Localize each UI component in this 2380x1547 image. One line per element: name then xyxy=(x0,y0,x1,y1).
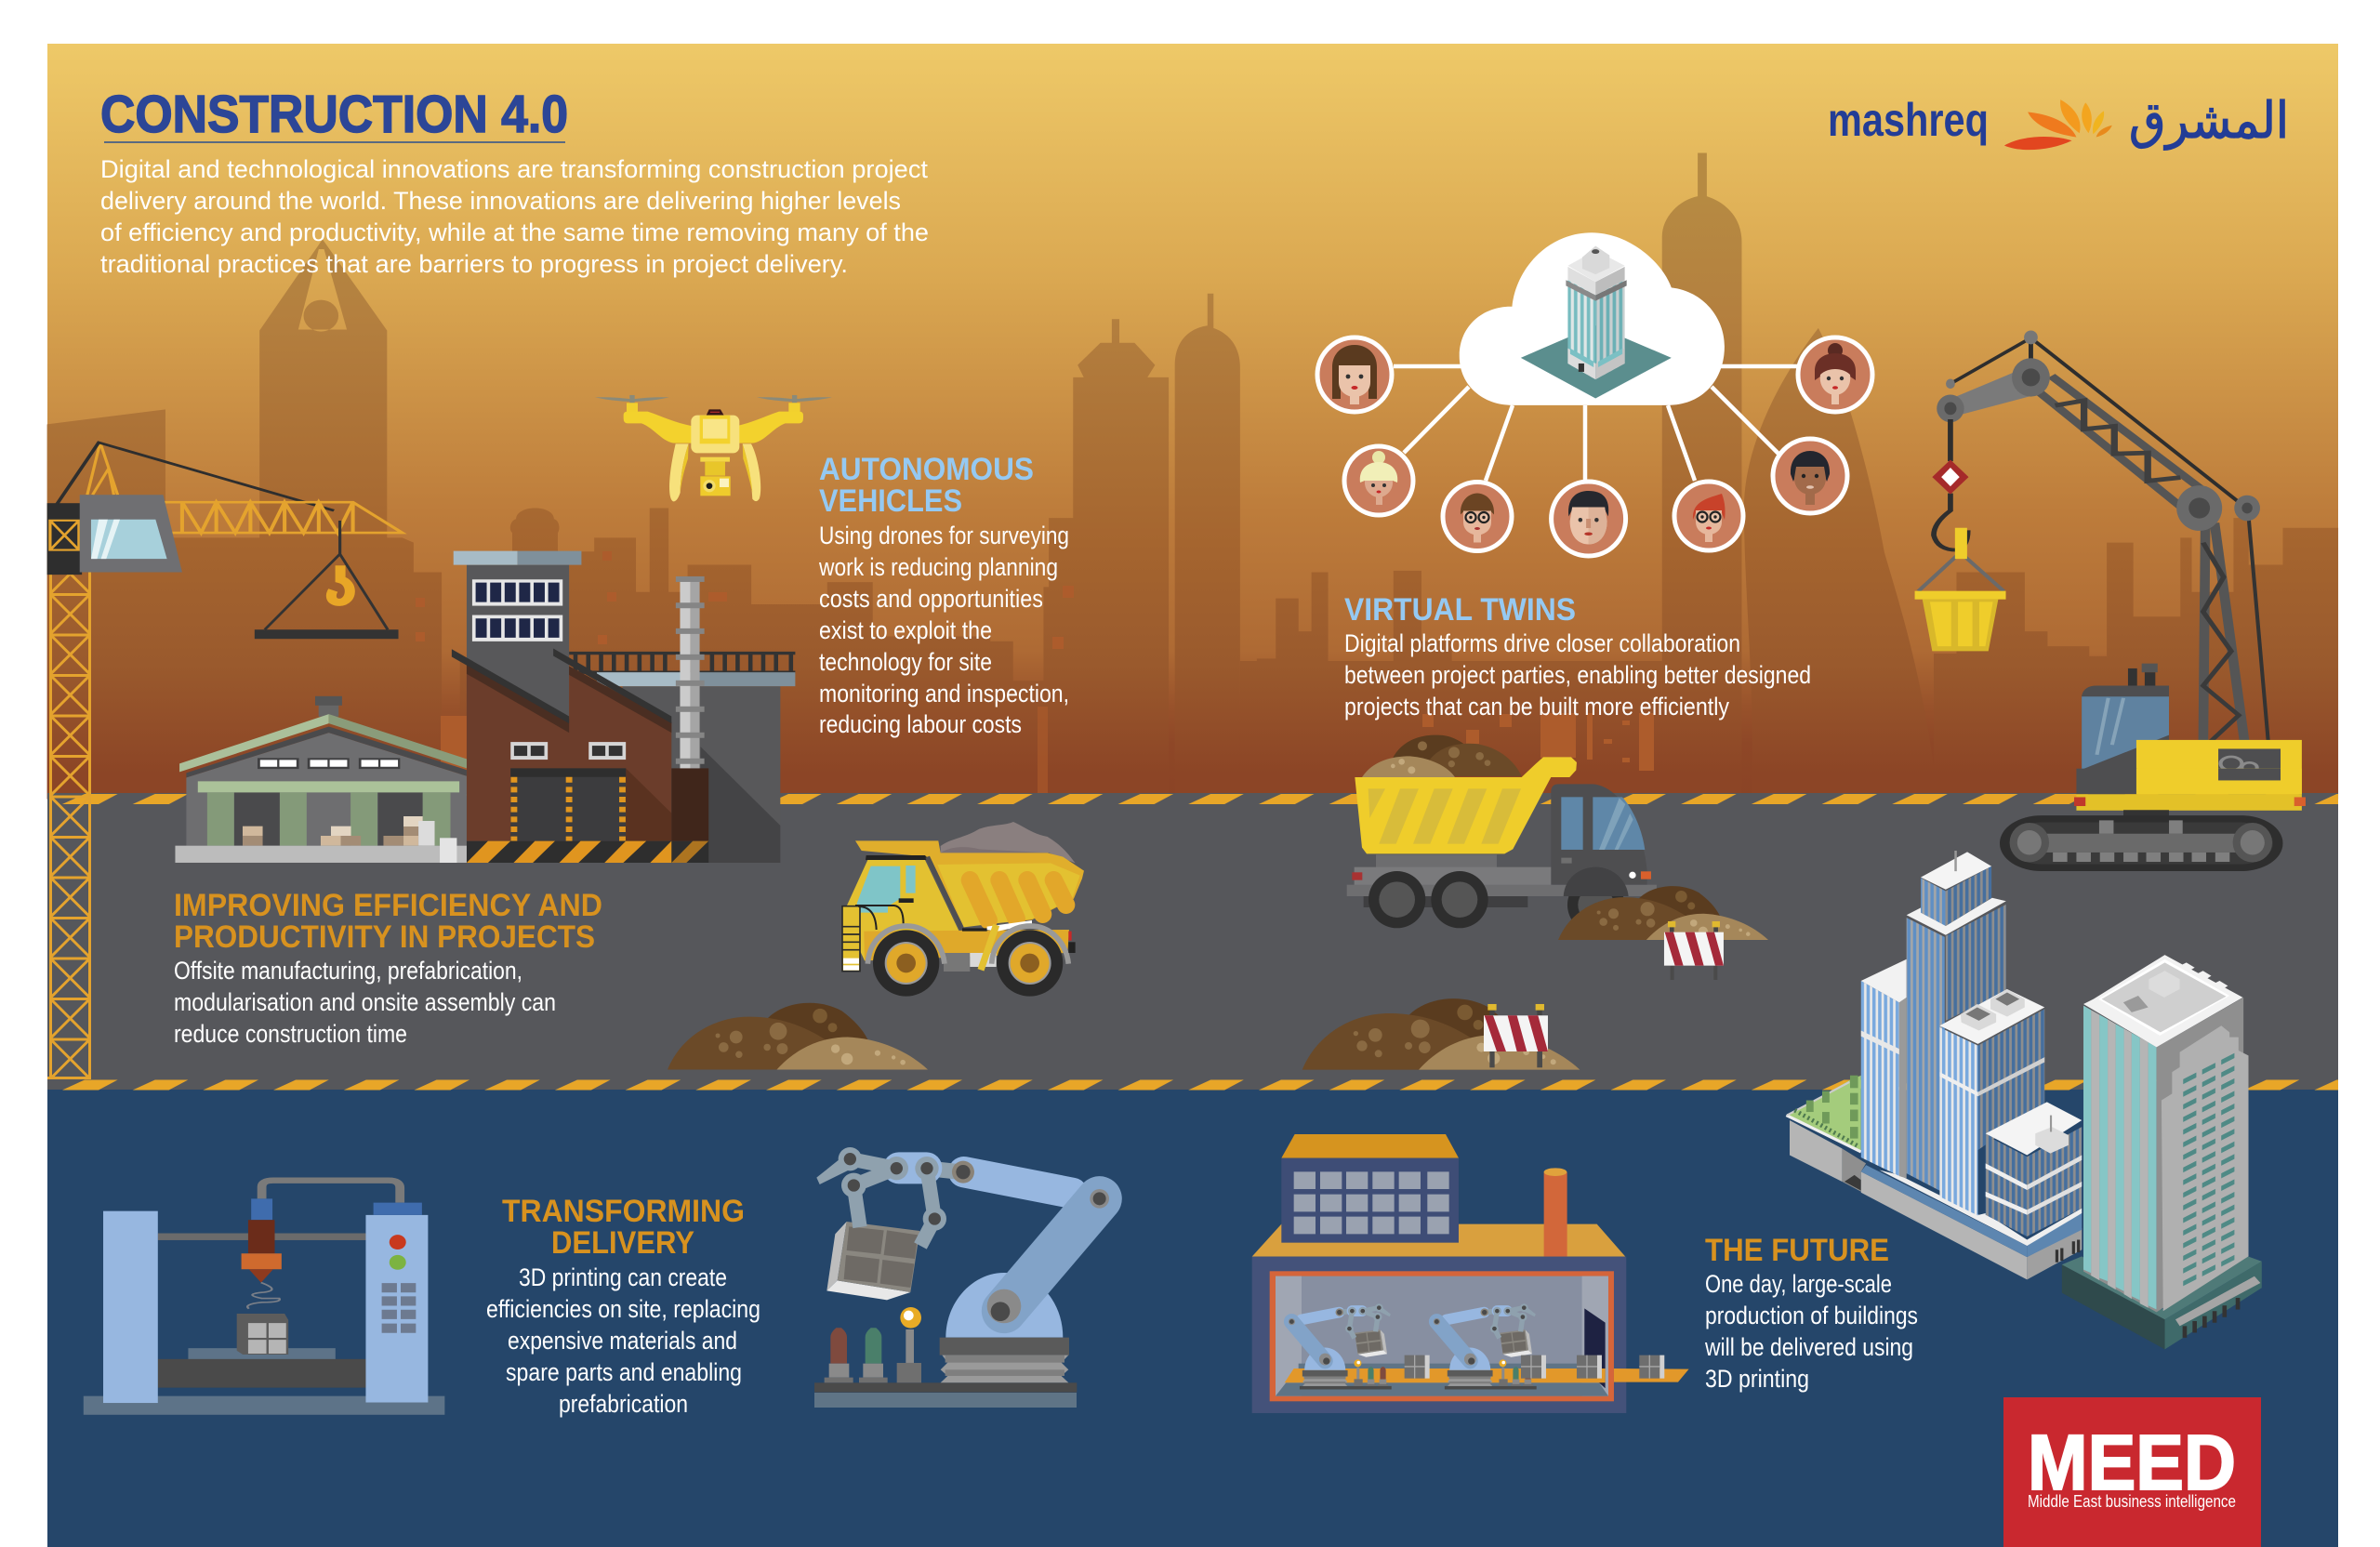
avatar 3 xyxy=(1344,446,1413,515)
text block: the future: production of buildings xyxy=(1705,1302,1918,1329)
intro text: delivery around the world. These innovations are delivering higher levels xyxy=(100,187,901,215)
front tower xyxy=(1939,989,2044,1215)
road hazard stripes top xyxy=(47,794,2338,804)
avatar 1 xyxy=(1317,337,1392,412)
text block: the future: THE FUTURE xyxy=(1705,1233,1889,1268)
skyline window details xyxy=(416,551,1654,795)
panel: blue lower band xyxy=(47,1090,2338,1547)
future city skyscraper cluster xyxy=(1786,851,2082,1279)
MEED logo: Middle East business intelligence xyxy=(2028,1492,2236,1511)
yellow mining dump truck xyxy=(842,822,1084,997)
text block: transforming delivery: spare parts and enabling xyxy=(506,1358,742,1386)
barrier upper xyxy=(1664,921,1724,980)
text block: transforming delivery: efficiencies on site, replacing xyxy=(486,1295,760,1323)
panel: sky background xyxy=(47,44,2338,797)
drone xyxy=(595,395,832,501)
robot arm xyxy=(814,1147,1109,1408)
avatar 7 xyxy=(1773,439,1847,513)
text block: improving efficiency: IMPROVING EFFICIENCY AND xyxy=(174,888,602,923)
text block: autonomous vehicles: work is reducing planning xyxy=(818,553,1058,581)
avatar 5 xyxy=(1552,482,1626,556)
skyline right half xyxy=(1175,152,2338,800)
text block: transforming delivery: prefabrication xyxy=(559,1390,688,1418)
text block: virtual twins: between project parties, enabling better designed xyxy=(1344,661,1811,689)
excavator crane xyxy=(1915,331,2302,794)
future city teal tower xyxy=(2062,955,2262,1349)
text block: autonomous vehicles: AUTONOMOUS xyxy=(819,452,1034,487)
road surface xyxy=(47,793,2338,1091)
intro text: Digital and technological innovations are transforming construction project xyxy=(100,155,929,183)
text block: virtual twins: projects that can be built more efficiently xyxy=(1344,693,1729,721)
mashreq logo: mashreq xyxy=(1828,94,1989,146)
text block: virtual twins xyxy=(1344,592,1811,721)
MEED logo: MEED xyxy=(2028,1419,2236,1506)
text block: autonomous vehicles: reducing labour costs xyxy=(819,710,1022,738)
avatar 6 xyxy=(1674,482,1743,550)
text block: autonomous vehicles: costs and opportunities xyxy=(819,585,1043,613)
MEED logo xyxy=(2003,1397,2261,1547)
3D printer xyxy=(84,1181,444,1415)
road hazard stripes bottom xyxy=(47,1080,2338,1090)
text block: the future: One day, large-scale xyxy=(1705,1270,1892,1298)
text block: improving efficiency xyxy=(174,888,602,1048)
text block: improving efficiency: Offsite manufacturing, prefabrication, xyxy=(174,957,522,985)
text block: autonomous vehicles: technology for site xyxy=(819,648,992,676)
tipper truck xyxy=(1347,735,1657,933)
intro text: of efficiency and productivity, while at the same time removing many of the xyxy=(100,218,929,246)
text block: autonomous vehicles: exist to exploit the xyxy=(819,616,992,644)
text block: improving efficiency: modularisation and onsite assembly can xyxy=(174,988,556,1016)
text block: autonomous vehicles xyxy=(818,452,1069,738)
avatar 4 xyxy=(1443,482,1512,550)
logo sunburst xyxy=(2004,99,2112,150)
intro text: traditional practices that are barriers to progress in project delivery. xyxy=(100,250,848,278)
text block: transforming delivery: DELIVERY xyxy=(551,1225,694,1261)
text block: transforming delivery xyxy=(486,1194,760,1418)
title: CONSTRUCTION 4.0 xyxy=(100,85,568,144)
mashreq logo xyxy=(1828,91,2289,150)
text block: virtual twins: VIRTUAL TWINS xyxy=(1344,592,1576,628)
text block: transforming delivery: 3D printing can create xyxy=(519,1263,727,1291)
tower crane xyxy=(47,443,403,1079)
mashreq logo: المشرق xyxy=(2129,91,2289,150)
text block: autonomous vehicles: monitoring and inspection, xyxy=(819,680,1069,707)
text block: the future xyxy=(1704,1233,1918,1393)
dirt pile right lower xyxy=(1302,998,1580,1070)
text block: transforming delivery: expensive materials and xyxy=(508,1327,737,1355)
text block: virtual twins: Digital platforms drive closer collaboration xyxy=(1344,629,1740,657)
dirt pile right upper xyxy=(1558,886,1768,940)
text block: autonomous vehicles: VEHICLES xyxy=(819,483,962,519)
factory with robots xyxy=(1252,1134,1689,1413)
low tower xyxy=(1986,1102,2082,1263)
cloud with digital twin xyxy=(1460,232,1725,405)
dirt pile left xyxy=(668,1003,928,1069)
avatar 2 xyxy=(1798,337,1872,412)
text block: the future: 3D printing xyxy=(1705,1365,1809,1393)
warehouse xyxy=(175,696,467,863)
excavator tracks xyxy=(2000,769,2306,871)
text block: improving efficiency: PRODUCTIVITY IN PROJECTS xyxy=(174,919,595,955)
central tower xyxy=(1907,851,2006,1194)
factory building xyxy=(452,551,795,863)
text block: transforming delivery: TRANSFORMING xyxy=(502,1194,745,1229)
city skyline silhouette xyxy=(47,239,1169,800)
text block: improving efficiency: reduce construction time xyxy=(174,1020,407,1048)
text block: the future: will be delivered using xyxy=(1704,1333,1913,1361)
text block: autonomous vehicles: Using drones for surveying xyxy=(819,522,1069,549)
intro text xyxy=(100,155,929,278)
barrier lower xyxy=(1484,1004,1548,1067)
crane hook and spreader bar xyxy=(255,521,399,639)
connector lines xyxy=(1394,366,1798,481)
left tower xyxy=(1861,959,1907,1178)
